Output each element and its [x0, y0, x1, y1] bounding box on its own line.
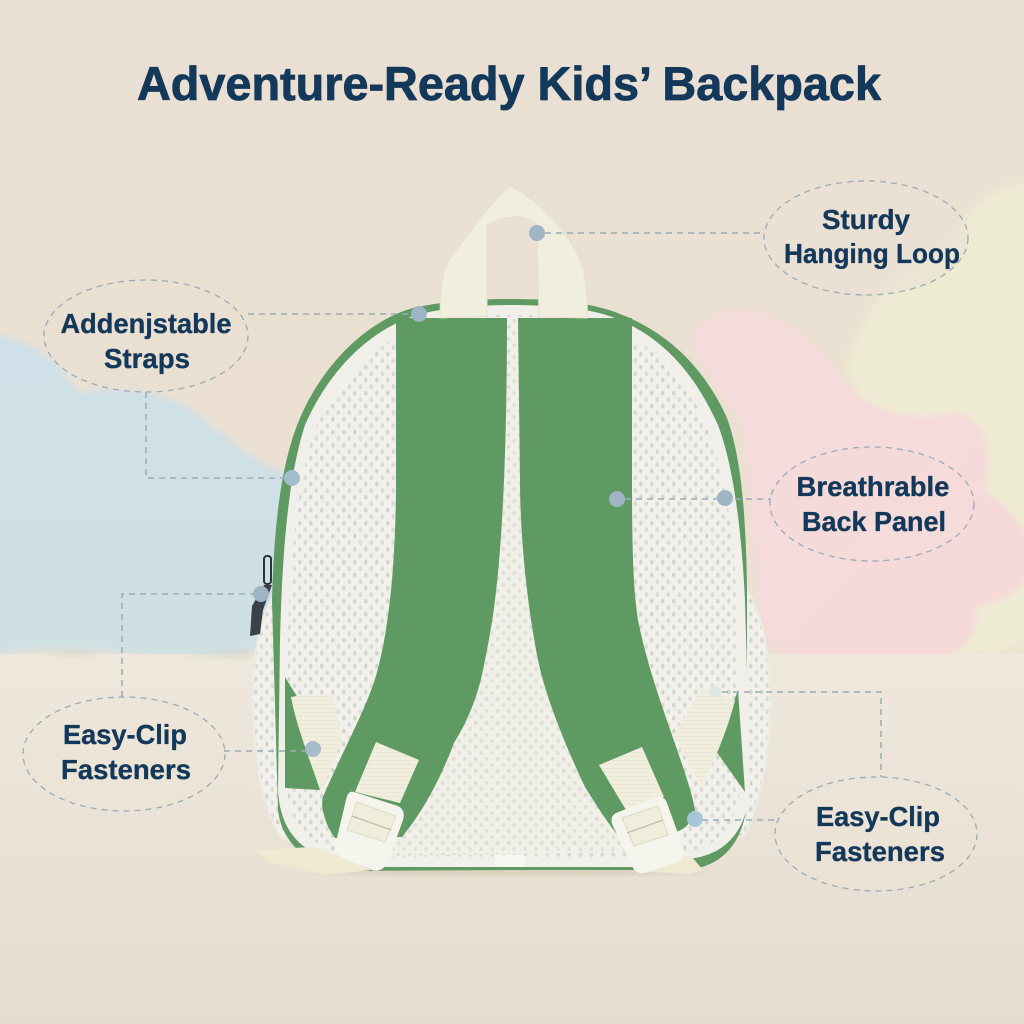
lower green corner right	[716, 690, 745, 792]
cloud cushion: pink	[690, 310, 1024, 666]
buckle right	[612, 797, 684, 873]
bottom rim piping	[380, 855, 680, 870]
leader: left clip upper	[122, 586, 269, 697]
callout: Breathrable Back Panel: Back Panel	[802, 506, 946, 537]
white piping	[278, 305, 750, 866]
cloud cushion: blue	[0, 335, 285, 657]
leader: adjustable straps top	[248, 306, 427, 322]
leader: adjustable straps side	[146, 392, 300, 486]
leader: right clip lower	[687, 811, 776, 827]
small webbing right	[673, 688, 735, 787]
leader: back panel	[609, 490, 771, 507]
callout: Sturdy Hanging Loop: Hanging Loop	[784, 238, 960, 269]
floor	[0, 654, 1024, 1024]
mesh back panel	[287, 315, 740, 857]
webbing tail right	[650, 855, 703, 874]
callout: Addenjstable Straps: Straps	[104, 343, 190, 374]
strap left	[322, 318, 507, 838]
cloud shadow on floor	[40, 650, 250, 658]
callout: Easy-Clip Fasteners left: Fasteners	[61, 754, 191, 785]
callout: Addenjstable Straps: Addenjstable	[60, 308, 232, 339]
leader: right clip upper	[709, 686, 881, 777]
webbing tail left	[254, 847, 371, 875]
small webbing left	[291, 694, 342, 793]
centre mesh	[385, 316, 630, 856]
callout: Easy-Clip Fasteners right	[775, 777, 977, 891]
callout: Easy-Clip Fasteners right: Easy-Clip	[816, 801, 940, 832]
adjuster webbing right	[599, 747, 664, 810]
leader: left clip lower	[224, 741, 321, 757]
zipper pull	[250, 556, 272, 636]
title: Adventure-Ready Kids’ Backpack	[137, 57, 882, 110]
callout: Breathrable Back Panel: Breathrable	[796, 471, 950, 502]
callout: Easy-Clip Fasteners right: Fasteners	[815, 836, 945, 867]
top handle loop	[440, 186, 587, 318]
callout: Sturdy Hanging Loop	[764, 181, 968, 295]
lower green corner left	[285, 677, 320, 790]
cloud cushion: yellow	[845, 180, 1024, 660]
callout: Sturdy Hanging Loop: Sturdy	[822, 204, 910, 235]
backpack green shell	[272, 299, 747, 871]
callout: Easy-Clip Fasteners left: Easy-Clip	[63, 719, 187, 750]
callout: Addenjstable Straps	[44, 280, 248, 392]
leader: hanging loop	[529, 225, 764, 241]
side pocket left	[253, 585, 330, 850]
adjuster webbing left	[355, 742, 419, 803]
buckle left	[335, 792, 404, 871]
background wall	[0, 0, 1024, 660]
side pocket right	[700, 585, 770, 850]
callout: Easy-Clip Fasteners left	[23, 697, 225, 811]
callout: Breathrable Back Panel	[770, 447, 974, 561]
strap right	[518, 318, 695, 850]
backpack	[250, 186, 770, 875]
contact shadow	[310, 867, 710, 875]
